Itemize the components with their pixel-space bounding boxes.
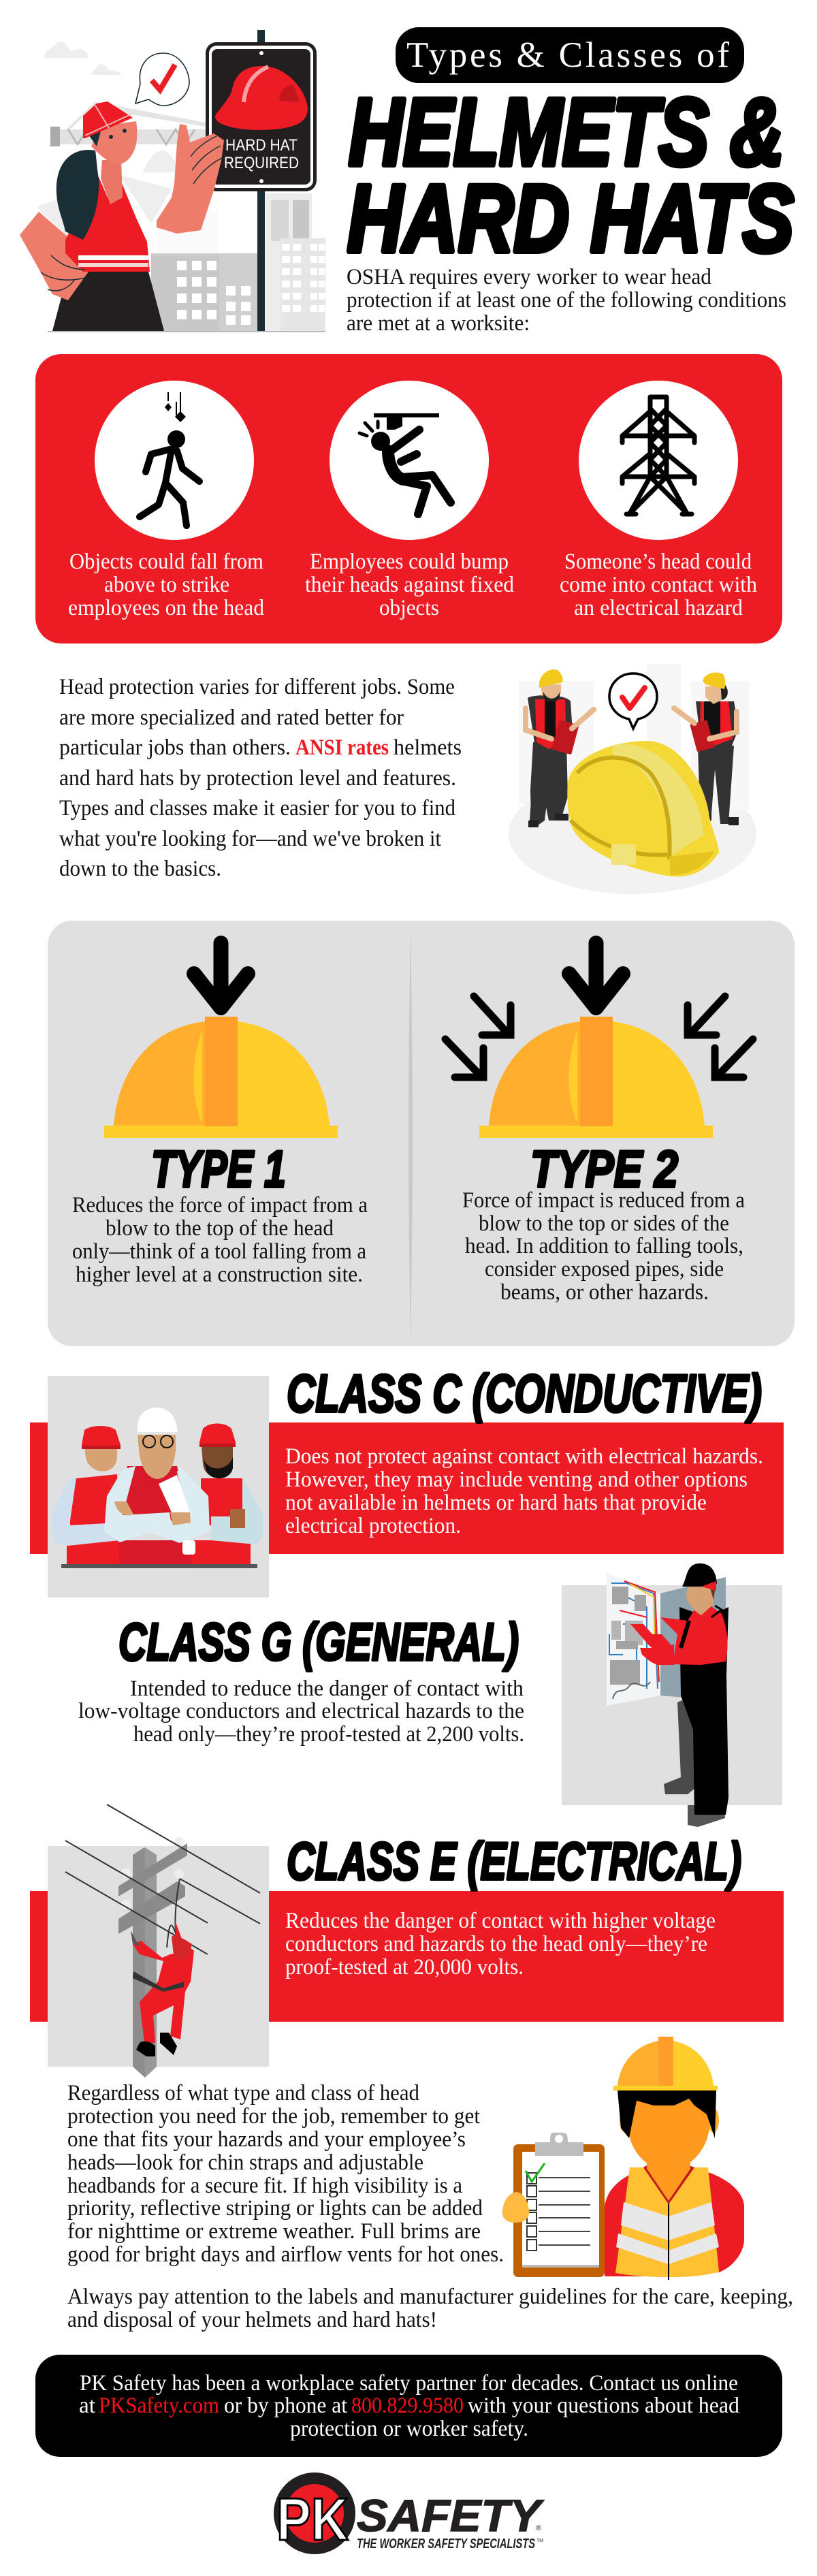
icon: falling objects (95, 381, 254, 540)
text: regardless of type and class: one that fits your hazards and your employee’s (67, 2127, 466, 2152)
illustration: worker beside hard hat required sign (20, 30, 325, 332)
illustration: three workers (52, 1408, 263, 1568)
icon: head bump (330, 381, 489, 540)
text: electrical hazard: an electrical hazard (574, 596, 743, 620)
left worker (70, 1474, 120, 1525)
heading: class G: CLASS G (GENERAL) (118, 1612, 519, 1672)
head (618, 2090, 719, 2170)
text: regardless of type and class: good for bright days and airflow vents for hot ones. (67, 2242, 504, 2267)
text: class E (285, 1909, 716, 1979)
text: falling objects (68, 550, 264, 620)
panel: class C (30, 1376, 784, 1597)
text: bump heads: Employees could bump (310, 550, 509, 574)
text: regardless of type and class (67, 2081, 504, 2267)
background: clouds, crane and city (44, 42, 325, 332)
text: type 2: beams, or other hazards. (500, 1280, 709, 1305)
right worker (201, 1478, 242, 1525)
text: class E: conductors and hazards to the head only—they’re (285, 1932, 707, 1956)
panel: class G image box (562, 1585, 782, 1805)
text: type 2: blow to the top or sides of the (479, 1211, 729, 1236)
text: head protection varies: are more specialized and rated better for (59, 705, 404, 730)
text: falling objects: employees on the head (68, 596, 264, 620)
panel: contact callout: with your questions about head (468, 2394, 739, 2418)
panel: types (48, 921, 795, 1346)
logo: PK Safety: TM (536, 2539, 543, 2543)
text: type 2 (462, 1188, 745, 1305)
text: class C: not available in helmets or hard hats that provide (285, 1491, 707, 1515)
text: class C: Does not protect against contact with electrical hazards. (285, 1444, 763, 1469)
icon: type 2 helmet (445, 943, 753, 1138)
text: falling objects: above to strike (104, 573, 229, 597)
text: electrical hazard: Someone’s head could (564, 550, 752, 574)
text: regardless of type and class: heads—look for chin straps and adjustable (67, 2150, 423, 2175)
icon: type 1 helmet (104, 943, 338, 1138)
text: head protection varies: particular jobs than others. (59, 735, 291, 760)
panel: contact callout (35, 2355, 782, 2457)
text: bump heads: objects (379, 596, 439, 620)
text: class G: Intended to reduce the danger of contact with (130, 1676, 524, 1701)
text: bump heads: their heads against fixed (305, 573, 514, 597)
icon: electrical tower (579, 381, 738, 540)
text: always pay attention: and disposal of your helmets and hard hats! (67, 2308, 437, 2332)
panel: contact callout: protection or worker safety. (290, 2417, 528, 2441)
lineman (131, 1920, 194, 2056)
check bubble (609, 673, 657, 729)
intro text: are met at a worksite: (347, 311, 530, 336)
electrician figure (630, 1563, 728, 1827)
text: falling objects: Objects could fall from (69, 550, 263, 574)
panel: contact callout: at (79, 2394, 95, 2418)
text: class G: low-voltage conductors and electrical hazards to the (78, 1699, 524, 1723)
body and vest (605, 2152, 744, 2280)
logo: PK Safety: SAFETY (357, 2490, 544, 2541)
intro text: OSHA requires every worker to wear head (347, 265, 711, 289)
text: regardless of type and class: for nighttime or extreme weather. Full brims are (67, 2219, 481, 2244)
text: always pay attention: Always pay attention to the labels and manufacturer guidelines for the care, keeping, (67, 2285, 793, 2309)
text: head protection varies: helmets (394, 735, 462, 760)
text: regardless of type and class: priority, reflective striping or lights can be added (67, 2196, 483, 2221)
sign post (257, 30, 265, 331)
text: head protection varies: what you're looking for—and we've broken it (59, 827, 441, 851)
yellow hard hat (613, 2037, 718, 2090)
text: electrical hazard (560, 550, 757, 620)
intro text (347, 265, 786, 336)
illustration: two inspectors and yellow helmet (509, 664, 756, 894)
text: head protection varies: Head protection varies for different jobs. Some (59, 675, 455, 699)
heading: type 2: TYPE 2 (530, 1141, 678, 1198)
text: type 1: Reduces the force of impact from a (72, 1193, 368, 1218)
center worker (123, 1466, 190, 1523)
logo: PK Safety (274, 2472, 544, 2554)
text: head protection varies: and hard hats by protection level and features. (59, 766, 456, 791)
intro text: protection if at least one of the following conditions (347, 288, 786, 313)
text: class C: electrical protection. (285, 1514, 461, 1538)
text: class C: However, they may include venting and other options (285, 1467, 748, 1492)
panel: contact callout: PKSafety.com (99, 2394, 219, 2418)
heading: type 1: TYPE 1 (151, 1141, 286, 1198)
text: bump heads (305, 550, 514, 620)
panel: OSHA conditions (35, 354, 782, 643)
text: electrical hazard: come into contact with (560, 573, 757, 597)
text: class G: head only—they’re proof-tested at 2,200 volts. (133, 1722, 524, 1747)
yellow hard hat (567, 741, 719, 876)
text: type 1: blow to the top of the head (106, 1216, 334, 1241)
panel: contact callout: PK Safety has been a workplace safety partner for decades. Contact us online (80, 2371, 738, 2396)
text: type 1: only—think of a tool falling from a (72, 1239, 366, 1264)
text: head protection varies: down to the basics. (59, 857, 221, 881)
right inspector (674, 673, 739, 825)
main title (347, 78, 794, 272)
text: type 2: head. In addition to falling tools, (465, 1234, 743, 1258)
text: head protection varies: ANSI rates (295, 735, 389, 760)
panel: contact callout: or by phone at (224, 2394, 347, 2418)
logo: PK Safety: ® (536, 2524, 541, 2532)
text: type 2: consider exposed pipes, side (485, 1257, 724, 1282)
text: class C (285, 1444, 763, 1538)
logo: PK Safety: THE WORKER SAFETY SPECIALISTS (357, 2537, 535, 2551)
clipboard (502, 2133, 605, 2277)
text: type 1: higher level at a construction site. (76, 1262, 363, 1287)
panel: contact callout: 800.829.9580 (351, 2394, 464, 2418)
text: head protection varies: Types and classes make it easier for you to find (59, 796, 455, 821)
panel: class E (30, 1804, 784, 2078)
worker woman (20, 101, 224, 331)
text: head protection varies (59, 675, 462, 881)
title pill (396, 27, 744, 83)
text: class G (78, 1676, 524, 1747)
logo: PK Safety: PK (276, 2485, 349, 2553)
text: class E: Reduces the danger of contact with higher voltage (285, 1909, 716, 1933)
text: regardless of type and class: Regardless of what type and class of head (67, 2081, 419, 2105)
title pill: Types & Classes of (406, 35, 729, 75)
text: regardless of type and class: headbands for a secure fit. If high visibility is a (67, 2174, 462, 2198)
hard hat required sign: REQUIRED (224, 154, 299, 172)
illustration: worker with clipboard (502, 2037, 744, 2280)
hard hat required sign (206, 42, 317, 191)
speech bubble with check mark (135, 53, 189, 106)
illustration: electrician at panel (607, 1563, 728, 1827)
illustration: lineman on utility pole (65, 1804, 260, 2078)
text: type 2: Force of impact is reduced from a (462, 1188, 745, 1213)
text: always pay attention (67, 2285, 793, 2332)
left inspector (526, 669, 594, 827)
text: class E: proof-tested at 20,000 volts. (285, 1955, 524, 1979)
text: regardless of type and class: protection you need for the job, remember to get (67, 2104, 480, 2129)
text: type 1 (72, 1193, 368, 1287)
hard hat required sign: HARD HAT (225, 136, 298, 155)
